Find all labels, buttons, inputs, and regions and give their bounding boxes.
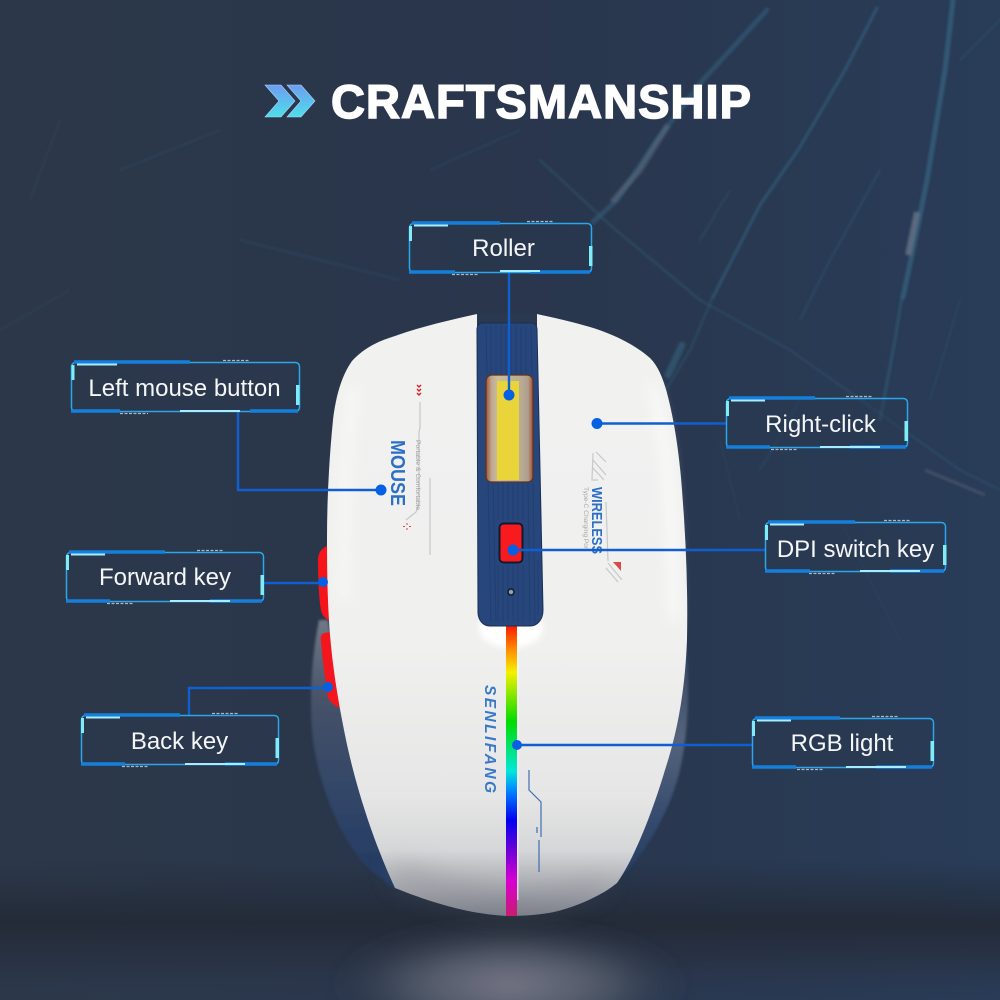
label box bbox=[765, 520, 946, 574]
forward key bbox=[318, 545, 330, 621]
connector bbox=[517, 744, 752, 746]
dot bbox=[376, 484, 386, 496]
print: type-c tagline: Type-C Charging Port bbox=[582, 487, 589, 551]
title bbox=[265, 75, 751, 128]
back key bbox=[321, 632, 340, 708]
print: mouse logo bbox=[386, 385, 430, 555]
connector bbox=[238, 412, 381, 490]
label box: Right-click bbox=[765, 411, 877, 438]
label box bbox=[726, 396, 908, 450]
mouse side grip right bbox=[610, 640, 688, 885]
dot bbox=[512, 740, 522, 750]
print: line bbox=[606, 502, 608, 561]
callout: dpi switch key bbox=[508, 520, 946, 574]
print: blue circuit bbox=[529, 770, 541, 872]
print: crosshair bbox=[403, 523, 411, 530]
rgb inner highlight bbox=[517, 640, 518, 900]
title text: CRAFTSMANSHIP bbox=[331, 75, 751, 128]
callout: rgb light bbox=[512, 716, 934, 770]
dot bbox=[592, 418, 602, 429]
dot bbox=[508, 544, 518, 556]
connector bbox=[597, 422, 726, 425]
centre control panel bbox=[477, 323, 543, 626]
icon: double chevron bbox=[265, 85, 315, 117]
print: wireless logo bbox=[582, 452, 622, 582]
label box bbox=[66, 550, 264, 604]
dot bbox=[318, 577, 328, 587]
print: brand name: SENLIFANG bbox=[481, 685, 498, 793]
print: red triangle bbox=[613, 562, 621, 571]
connector bbox=[264, 582, 323, 584]
scroll wheel window bbox=[486, 375, 533, 482]
label box bbox=[71, 360, 300, 414]
callout: forward key bbox=[66, 550, 328, 604]
label box bbox=[81, 714, 279, 766]
panel base bbox=[477, 323, 543, 626]
callout: roller bbox=[409, 222, 592, 400]
channel gap bbox=[477, 314, 537, 326]
label box: Left mouse button bbox=[88, 375, 281, 402]
DPI switch bbox=[500, 524, 522, 562]
background scratches bbox=[0, 0, 1000, 640]
connector bbox=[513, 549, 765, 551]
label box: Back key bbox=[131, 728, 228, 755]
yellow wheel bbox=[497, 381, 519, 480]
panel ribs bbox=[486, 326, 538, 622]
connector bbox=[189, 688, 328, 715]
rgb glow base bbox=[479, 608, 543, 648]
callout: back key bbox=[81, 682, 333, 766]
print: tagline: Portable & Comfortable bbox=[414, 440, 421, 510]
label box: Roller bbox=[472, 235, 535, 262]
print: mouse text: MOUSE bbox=[386, 440, 408, 506]
dot bbox=[323, 682, 333, 692]
print: grey circuit lines bbox=[406, 402, 430, 555]
body edge highlights bbox=[339, 385, 362, 600]
floor shadow band bbox=[0, 860, 1000, 1000]
label box bbox=[752, 716, 934, 770]
label box: RGB light bbox=[791, 730, 894, 757]
mouse body bbox=[327, 314, 687, 916]
print: hatches bbox=[592, 452, 622, 582]
label box: DPI switch key bbox=[777, 536, 934, 563]
dot bbox=[504, 390, 514, 400]
mouse bbox=[311, 314, 688, 916]
callout: right-click bbox=[592, 396, 908, 450]
connector bbox=[508, 273, 510, 395]
callout: left mouse button bbox=[71, 360, 386, 496]
mouse side grip left bbox=[311, 620, 396, 890]
rgb light strip bbox=[506, 626, 517, 916]
print: red chevrons bbox=[417, 385, 421, 395]
label box: Forward key bbox=[99, 564, 231, 591]
indicator hole bbox=[508, 589, 514, 595]
body bottom-edge shading bbox=[385, 862, 617, 916]
label box bbox=[409, 222, 592, 274]
print: wireless text: WIRELESS bbox=[588, 487, 605, 554]
floor reflection glow bbox=[335, 927, 685, 1000]
